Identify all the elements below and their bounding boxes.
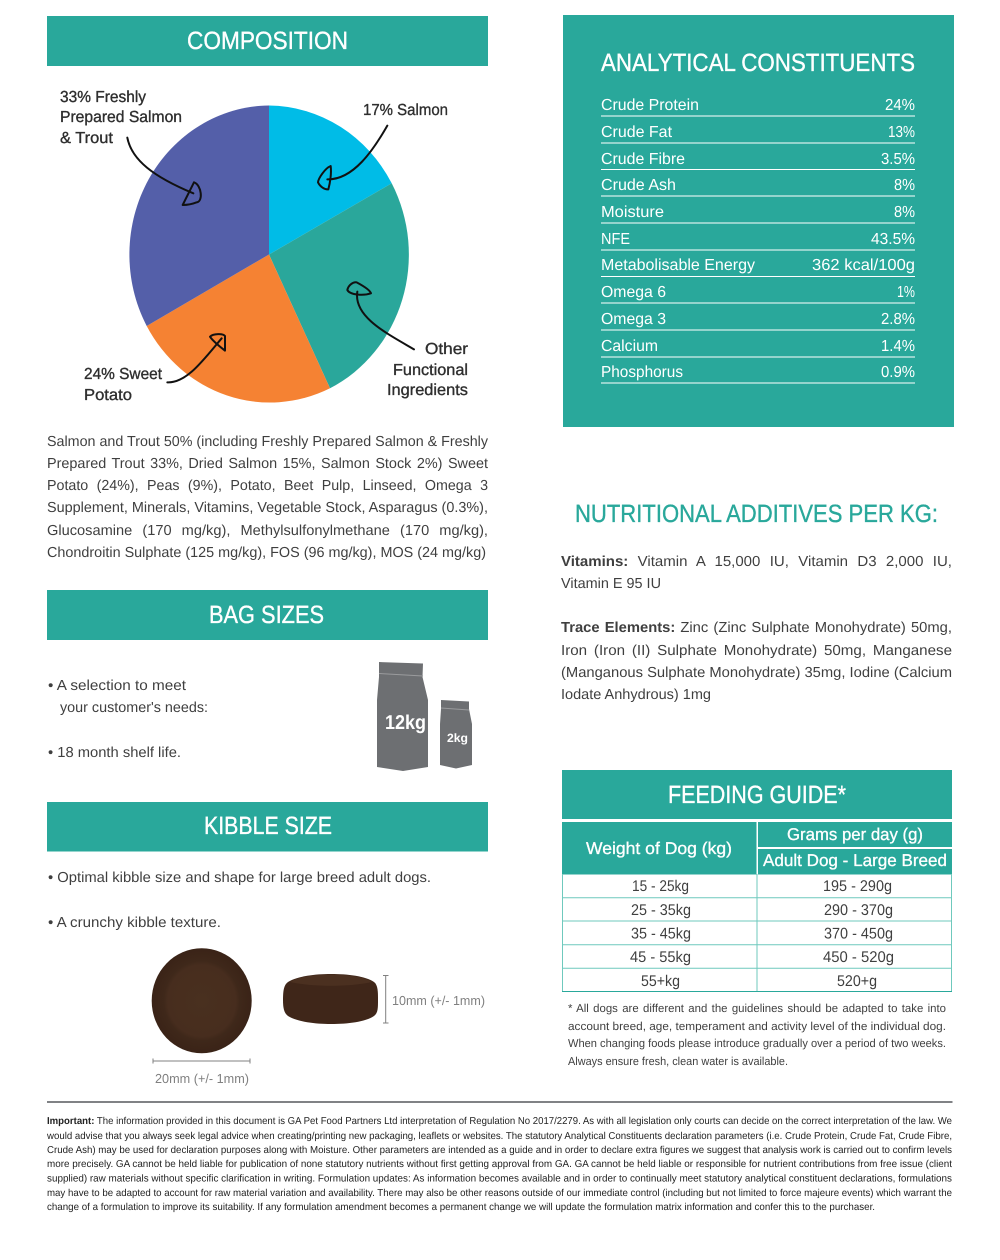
constituents table: 1% xyxy=(897,284,915,301)
feeding table header: Adult Dog - Large Breed xyxy=(763,851,947,870)
ingredients text xyxy=(47,434,489,561)
bag sizes text: your customer's needs: xyxy=(60,700,208,716)
panel: bag sizes heading: BAG SIZES xyxy=(209,601,324,629)
pie labels: Other xyxy=(425,341,469,358)
constituents table: 24% xyxy=(885,97,915,114)
constituents table: Moisture xyxy=(601,204,664,221)
pie labels: & Trout xyxy=(60,130,114,147)
feeding note: When changing foods please introduce gradually over a period of two weeks. xyxy=(568,1038,946,1050)
kibble height dimension: 10mm (+/- 1mm) xyxy=(392,993,485,1008)
pie labels: Potato xyxy=(84,387,132,404)
icon: kibble top view xyxy=(152,948,252,1053)
pie labels: 33% Freshly xyxy=(60,89,146,106)
icon: 2kg bag: 2kg xyxy=(447,731,468,745)
trace elements text: Trace Elements: Zinc (Zinc Sulphate Monohydrate) 50mg, xyxy=(561,620,952,636)
kibble width dimension xyxy=(153,1058,250,1086)
panel: kibble size heading: KIBBLE SIZE xyxy=(204,812,332,840)
panel: kibble size heading xyxy=(47,802,488,852)
vitamins text: Vitamin E 95 IU xyxy=(561,576,661,592)
disclaimer text: Important: The information provided in this document is GA Pet Food Partners Ltd interpretation of Regulation No 2017/2279. As with all legislation only courts can decide on the correct interpretation of the law. We xyxy=(47,1116,952,1127)
feeding note: account breed, age, temperament and activity level of the individual dog. xyxy=(568,1021,946,1033)
disclaimer text: Crude Ash) may be used for declaration purposes along with Moisture. Other parameters are intended as a guide and in order to declare extra figures we suggest that analysis work is carried out to confirm levels xyxy=(47,1145,952,1156)
bag sizes text xyxy=(48,678,208,761)
icon: 2kg bag xyxy=(440,700,472,768)
disclaimer text: may have to be adapted to account for raw material variation and availability. There may also be other reasons outside of our immediate control (including but not limited to force majeure events) which warrant the xyxy=(47,1188,952,1199)
constituents table xyxy=(601,97,915,383)
constituents table: 43.5% xyxy=(871,231,915,248)
feeding guide heading: FEEDING GUIDE* xyxy=(668,781,846,809)
pie labels xyxy=(60,89,469,404)
constituents table: Omega 3 xyxy=(601,311,666,328)
disclaimer text: supplied) raw materials without specific clarification in writing. Formulation updates: As information becomes available and in order to continually meet statutory analytical constituent declarations, formulations xyxy=(47,1174,952,1184)
feeding table rows: 55+kg xyxy=(641,973,680,990)
feeding table rows: 370 - 450g xyxy=(824,926,893,942)
feeding table rows: 450 - 520g xyxy=(823,949,894,966)
disclaimer text: more precisely. GA cannot be held liable for publication of none statutory nutrients without first getting approval from GA. GA cannot be held liable or responsible for nutrient contributions from free issue (client xyxy=(47,1159,952,1170)
constituents table: 362 kcal/100g xyxy=(812,257,915,274)
constituents table: Phosphorus xyxy=(601,364,683,381)
constituents table: Crude Protein xyxy=(601,97,699,114)
constituents table: Crude Ash xyxy=(601,177,676,194)
kibble height dimension xyxy=(383,976,485,1023)
feeding table rows xyxy=(562,874,952,992)
heading: analytical constituents: ANALYTICAL CONSTITUENTS xyxy=(601,49,915,77)
feeding note: * All dogs are different and the guidelines should be adapted to take into xyxy=(568,1003,946,1015)
pie labels: 24% Sweet xyxy=(84,366,163,383)
bag sizes text: • 18 month shelf life. xyxy=(48,745,181,761)
heading: nutritional additives: NUTRITIONAL ADDITIVES PER KG: xyxy=(575,500,938,528)
ingredients text: Prepared Trout 33%, Dried Salmon 15%, Salmon Stock 2%) Sweet xyxy=(47,456,488,472)
ingredients text: Potato (24%), Peas (9%), Potato, Beet Pulp, Linseed, Omega 3 xyxy=(47,478,488,494)
icon: pie callout arrows xyxy=(127,126,414,382)
constituents table: 2.8% xyxy=(881,311,915,328)
feeding table rows: 35 - 45kg xyxy=(631,926,691,942)
pie labels: Functional xyxy=(393,362,468,379)
feeding table header xyxy=(562,822,952,874)
disclaimer text xyxy=(46,1116,952,1213)
disclaimer text: change of a formulation to improve its suitability. If any formulation amendment becomes a permanent change we will update the formulation matrix information and confer this to the purchaser. xyxy=(47,1202,875,1213)
ingredients text: Salmon and Trout 50% (including Freshly Prepared Salmon & Freshly xyxy=(47,434,489,450)
icon: 12kg bag: 12kg xyxy=(385,712,426,734)
panel: feeding guide xyxy=(562,770,952,992)
bag sizes text: • A selection to meet xyxy=(48,678,186,694)
icon: kibble side view xyxy=(283,974,378,1024)
constituents table: 1.4% xyxy=(881,338,915,355)
trace elements text: Iodate Anhydrous) 1mg xyxy=(561,687,711,703)
trace elements text: (Manganous Sulphate Monohydrate) 35mg, Iodine (Calcium xyxy=(561,665,952,681)
constituents table: 0.9% xyxy=(881,364,915,381)
feeding table rows: 195 - 290g xyxy=(823,878,892,895)
constituents table: Metabolisable Energy xyxy=(601,257,755,274)
feeding table rows: 25 - 35kg xyxy=(631,902,691,919)
ingredients text: Chondroitin Sulphate (125 mg/kg), FOS (96 mg/kg), MOS (24 mg/kg) xyxy=(47,545,486,561)
panel: composition heading xyxy=(47,16,488,66)
ingredients text: Glucosamine (170 mg/kg), Methylsulfonylmethane (170 mg/kg), xyxy=(47,523,488,539)
panel: bag sizes heading xyxy=(47,590,488,640)
icon: 12kg bag xyxy=(377,662,428,771)
trace elements text: Iron (Iron (II) Sulphate Monohydrate) 50mg, Manganese xyxy=(561,643,952,659)
pie chart xyxy=(129,106,409,403)
feeding table rows: 45 - 55kg xyxy=(630,949,691,966)
kibble width dimension: 20mm (+/- 1mm) xyxy=(155,1071,249,1086)
constituents table: Omega 6 xyxy=(601,284,666,301)
feeding table rows: 520+g xyxy=(837,973,877,990)
vitamins text: Vitamins: Vitamin A 15,000 IU, Vitamin D3 2,000 IU, xyxy=(561,554,952,570)
panel: analytical constituents xyxy=(563,15,954,427)
constituents table: Crude Fibre xyxy=(601,151,685,168)
feeding note: Always ensure fresh, clean water is available. xyxy=(568,1056,788,1068)
disclaimer text: would advise that you always seek legal advice when creating/printing new packaging, leaflets or websites. The statutory Analytical Constituents declaration parameters (i.e. Crude Protein, Crude Fat, Crude Fibre, xyxy=(46,1131,952,1142)
constituents table: 13% xyxy=(888,124,915,141)
panel: composition heading: COMPOSITION xyxy=(187,27,348,55)
pie labels: 17% Salmon xyxy=(363,102,448,119)
constituents table: Calcium xyxy=(601,338,658,355)
feeding table header: Grams per day (g) xyxy=(787,825,923,844)
ingredients text: Supplement, Minerals, Vitamins, Vegetable Stock, Asparagus (0.3%), xyxy=(47,500,488,516)
feeding table header: Weight of Dog (kg) xyxy=(586,839,732,858)
constituents table: 3.5% xyxy=(881,151,915,168)
feeding note xyxy=(568,1003,946,1068)
kibble text: • Optimal kibble size and shape for large breed adult dogs. xyxy=(48,870,431,886)
trace elements text xyxy=(561,620,952,703)
kibble text: • A crunchy kibble texture. xyxy=(48,915,221,931)
vitamins text xyxy=(561,554,952,592)
kibble text xyxy=(48,870,431,931)
constituents table: NFE xyxy=(601,231,630,248)
pie labels: Ingredients xyxy=(387,382,468,399)
feeding table rows: 15 - 25kg xyxy=(632,878,689,895)
pie labels: Prepared Salmon xyxy=(60,109,182,126)
constituents table: Crude Fat xyxy=(601,124,673,141)
feeding guide heading xyxy=(562,770,952,819)
feeding table rows: 290 - 370g xyxy=(824,902,893,919)
constituents table: 8% xyxy=(894,177,915,194)
constituents table: 8% xyxy=(894,204,915,221)
